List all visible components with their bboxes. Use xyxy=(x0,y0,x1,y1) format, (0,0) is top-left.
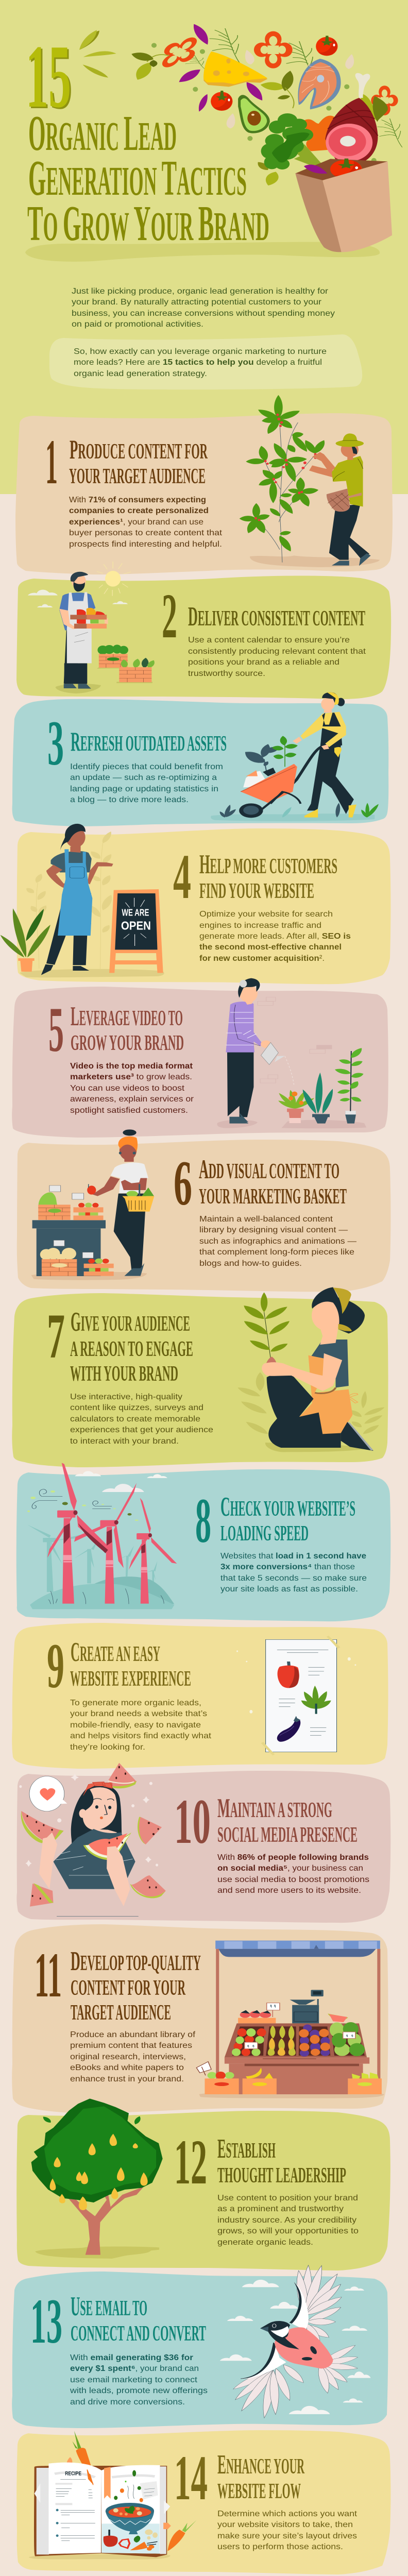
body text: engines to increase traffic and xyxy=(199,921,321,930)
heading xyxy=(217,2450,304,2503)
illustration: fruit market stall xyxy=(196,1941,384,2098)
card background xyxy=(16,1469,390,1621)
body text: landing page or updating statistics in xyxy=(70,785,218,793)
card background xyxy=(12,2272,388,2428)
body text: generate more leads. After all, SEO is xyxy=(199,932,351,941)
body text: companies to create personalized xyxy=(69,506,209,515)
title xyxy=(27,106,269,251)
body text: calculators to create memorable xyxy=(70,1415,200,1423)
intro callout text: So, how exactly can you leverage organic marketing to nurture xyxy=(74,347,327,356)
illustration: shop owner with open sign: OPEN xyxy=(121,919,151,933)
card background xyxy=(12,1623,388,1769)
panel: tactic 11: 11 xyxy=(35,1940,62,2010)
body text: blogs and how-to guides. xyxy=(199,1259,302,1268)
body text: Maintain a well-balanced content xyxy=(199,1215,333,1224)
body text: You can use videos to boost xyxy=(70,1084,185,1093)
panel: tactic 4 xyxy=(0,824,391,984)
card background xyxy=(12,1924,388,2113)
body text: grows, so will your opportunities to xyxy=(217,2227,359,2235)
body text: Video is the top media format xyxy=(70,1062,193,1071)
body text: enhance trust in your brand. xyxy=(70,2075,184,2083)
card background xyxy=(16,576,391,699)
illustration: woman pushing wheelbarrow xyxy=(211,692,380,821)
heading xyxy=(69,435,208,488)
panel: tactic 13: CONNECT AND CONVERT xyxy=(71,2322,206,2346)
title number 15 xyxy=(26,26,73,128)
title: GENERATION TACTICS xyxy=(28,150,247,206)
body text xyxy=(70,2030,196,2083)
heading xyxy=(71,2292,206,2346)
body text: Use a content calendar to ensure you’re xyxy=(188,636,350,645)
body text: they’re looking for. xyxy=(70,1743,145,1752)
heading: WITH YOUR BRAND xyxy=(70,1362,178,1386)
body text: original research, interviews, xyxy=(70,2053,186,2061)
body text: Websites that load in 1 second have xyxy=(220,1552,366,1561)
card background xyxy=(16,2430,390,2574)
heading xyxy=(71,1946,201,2025)
number 9: 9 xyxy=(47,1631,64,1701)
body text: and send more users to its website. xyxy=(217,1886,361,1895)
number 6: 6 xyxy=(174,1148,192,1218)
panel: tactic 8 xyxy=(16,1463,390,1621)
heading xyxy=(217,2134,346,2188)
body text: Use content to position your brand xyxy=(217,2194,358,2202)
title number 15: 15 xyxy=(27,28,73,128)
card background xyxy=(17,1140,390,1292)
panel: tactic 6 xyxy=(17,1129,390,1292)
intro callout text: more leads? Here are 15 tactics to help you develop a fruitful xyxy=(74,358,322,367)
body text: such as infographics and animations — xyxy=(199,1237,356,1246)
title: TO GROW YOUR BRAND xyxy=(27,196,269,251)
heading xyxy=(70,1307,193,1386)
body text xyxy=(217,2194,359,2247)
panel: tactic 5: 5 xyxy=(48,994,64,1065)
illustration: recipe page with vegetables xyxy=(236,1636,356,1755)
heading: A REASON TO ENGAGE xyxy=(70,1337,193,1361)
panel: tactic 7 xyxy=(12,1287,388,1467)
intro text: Just like picking produce, organic lead generation is healthy for xyxy=(72,287,329,296)
body text: the second most-effective channel xyxy=(199,943,342,952)
body text xyxy=(70,1699,212,1752)
heading: CREATE AN EASY xyxy=(71,1637,160,1667)
body text xyxy=(199,1215,356,1268)
panel: tactic 13 xyxy=(12,2265,388,2428)
body text: experiences¹ , your brand can use xyxy=(69,518,203,527)
heading xyxy=(70,1637,191,1691)
body text: an update — such as re-optimizing a xyxy=(70,773,217,782)
body text xyxy=(70,762,223,804)
body text: generate organic leads. xyxy=(217,2238,313,2247)
intro callout blob xyxy=(49,334,362,389)
body text: With 71% of consumers expecting xyxy=(69,496,206,504)
heading: PRODUCE CONTENT FOR xyxy=(70,435,208,465)
body text: premium content that features xyxy=(70,2041,192,2050)
body text: Determine which actions you want xyxy=(217,2510,358,2518)
panel: tactic 1: 1 xyxy=(45,427,58,497)
body text: spotlight satisfied customers. xyxy=(70,1106,188,1115)
body text xyxy=(220,1552,367,1594)
title ground shadow xyxy=(25,242,380,262)
body text xyxy=(199,910,351,963)
heading: DEVELOP TOP-QUALITY xyxy=(71,1946,201,1976)
body text: and drive more conversions. xyxy=(70,2398,185,2406)
title: ORGANIC LEAD xyxy=(28,106,177,161)
body text: content like quizzes, surveys and xyxy=(70,1403,203,1412)
body text: and helps visitors find exactly what xyxy=(70,1732,212,1740)
body text: use email marketing to connect xyxy=(70,2376,198,2384)
panel: tactic 11 xyxy=(12,1924,388,2113)
body text: Produce an abundant library of xyxy=(70,2030,196,2039)
card background xyxy=(12,987,388,1138)
body text xyxy=(70,1062,194,1115)
illustration: recipe book with soup xyxy=(29,2431,196,2560)
illustration: food falling into paper bag xyxy=(79,24,402,252)
body text: trustworthy source. xyxy=(188,669,265,678)
body text: your website visitors to take, then xyxy=(217,2520,353,2529)
illustration: shop owner with open sign: WE ARE xyxy=(122,907,149,918)
panel: tactic 2: 2 xyxy=(162,581,177,651)
panel: tactic 12 xyxy=(16,2098,390,2270)
illustration: farmer with crate, sun and clouds xyxy=(28,562,157,693)
body text xyxy=(69,496,223,549)
heading: TARGET AUDIENCE xyxy=(71,2001,171,2025)
illustration: wind turbines on hills xyxy=(27,1463,177,1609)
header panel xyxy=(25,24,402,389)
body text: that take 5 seconds — so make sure xyxy=(220,1574,367,1583)
body text: Identify pieces that could benefit from xyxy=(70,762,223,771)
illustration: bird flying among clouds xyxy=(220,2265,371,2418)
panel: tactic 1 xyxy=(15,395,393,574)
body text: users to perform those actions. xyxy=(217,2543,343,2551)
intro text xyxy=(72,287,335,329)
number 13: 13 xyxy=(30,2286,62,2357)
illustration: shopper at market stall xyxy=(31,1129,154,1280)
panel: tactic 14 xyxy=(16,2430,390,2574)
heading xyxy=(220,1492,355,1546)
body text: consistently producing relevant content that xyxy=(188,647,366,656)
number 3: 3 xyxy=(47,708,64,778)
illustration: woman eating watermelon xyxy=(19,1763,166,1916)
heading: CONTENT FOR YOUR xyxy=(71,1976,185,2000)
heading: GROW YOUR BRAND xyxy=(71,1031,184,1055)
panel: tactic 9: WEBSITE EXPERIENCE xyxy=(70,1667,191,1691)
body text: your site loads as fast as possible. xyxy=(220,1585,358,1594)
body text xyxy=(217,2510,358,2551)
body text: with leads, promote new offerings xyxy=(70,2386,208,2395)
heading: LOADING SPEED xyxy=(220,1522,309,1546)
panel: tactic 3 xyxy=(12,692,388,826)
body text: make sure your site’s layout drives xyxy=(217,2532,357,2540)
number 12: 12 xyxy=(174,2127,207,2197)
heading xyxy=(71,1002,184,1055)
body text xyxy=(188,636,366,678)
panel: tactic 10 xyxy=(16,1763,390,1923)
number 8: 8 xyxy=(195,1485,211,1556)
body text: eBooks and white papers to xyxy=(70,2063,184,2072)
body text: With email generating $36 for xyxy=(70,2353,193,2362)
heading: WEBSITE FLOW xyxy=(217,2480,301,2503)
body text: awareness, explain services or xyxy=(70,1095,194,1104)
panel: tactic 5: LEVERAGE VIDEO TO xyxy=(71,1002,183,1031)
heading xyxy=(217,1793,358,1847)
intro text: business, you can increase conversions without spending money xyxy=(72,309,335,318)
body text: 3x more conversions⁴ than those xyxy=(220,1563,355,1571)
body text xyxy=(70,2353,208,2406)
card background xyxy=(12,1293,388,1467)
body text: for new customer acquisition ². xyxy=(199,954,325,963)
number 7: 7 xyxy=(47,1301,65,1371)
body text: your brand needs a website that’s xyxy=(70,1709,207,1718)
card background xyxy=(15,413,393,574)
body text: industry source. As your credibility xyxy=(217,2216,356,2225)
title number 15: 15 xyxy=(26,26,71,126)
heading: GIVE YOUR AUDIENCE xyxy=(71,1307,190,1337)
heading xyxy=(199,1155,347,1209)
body text xyxy=(217,1853,369,1895)
card background xyxy=(12,699,388,826)
body text: use social media to boost promotions xyxy=(217,1875,369,1884)
number 10: 10 xyxy=(174,1786,211,1857)
number 14: 14 xyxy=(174,2443,208,2513)
body text: mobile-friendly, easy to navigate xyxy=(70,1721,201,1730)
intro text: on paid or promotional activities. xyxy=(72,320,203,329)
body text: library by designing visual content — xyxy=(199,1226,348,1234)
illustration: woman holding seedling xyxy=(236,1287,386,1452)
body text: as a prominent and trustworthy xyxy=(217,2205,344,2213)
body text: every $1 spent⁶ , your brand can xyxy=(70,2364,199,2373)
illustration: pear tree xyxy=(31,2098,163,2259)
body text: marketers use³ to grow leads. xyxy=(70,1073,192,1081)
body text: prospects find interesting and helpful. xyxy=(69,540,222,549)
illustration: recipe book with soup: RECIPE xyxy=(65,2470,81,2477)
body text: to interact with your brand. xyxy=(70,1437,179,1446)
card background xyxy=(17,828,390,984)
body text: on social media⁵ , your business can xyxy=(217,1864,363,1873)
heading: ENHANCE YOUR xyxy=(217,2450,304,2480)
intro text: your brand. By naturally attracting potential customers to your xyxy=(72,298,322,307)
panel: tactic 1: YOUR TARGET AUDIENCE xyxy=(69,465,206,488)
illustration: farmer picking berries xyxy=(240,395,380,567)
body text: buyer personas to create content that xyxy=(69,529,223,537)
heading: USE EMAIL TO xyxy=(71,2292,147,2321)
body text: To generate more organic leads, xyxy=(70,1699,201,1707)
heading: REFRESH OUTDATED ASSETS xyxy=(71,727,227,757)
body text: experiences that get your audience xyxy=(70,1426,213,1434)
body text: that complement long-form pieces like xyxy=(199,1248,354,1257)
panel: tactic 5 xyxy=(12,978,388,1138)
body text: With 86% of people following brands xyxy=(217,1853,369,1862)
heading xyxy=(199,850,337,903)
heading: ESTABLISH xyxy=(217,2134,276,2164)
panel: tactic 2 xyxy=(16,562,391,699)
card background xyxy=(16,2111,390,2270)
number 4: 4 xyxy=(173,841,191,912)
body text xyxy=(70,1393,213,1446)
panel: tactic 9 xyxy=(12,1623,388,1769)
intro callout text: organic lead generation strategy. xyxy=(74,369,207,378)
illustration: shop owner with open sign xyxy=(0,824,164,977)
body text: a blog — to drive more leads. xyxy=(70,795,189,804)
body text: Optimize your website for search xyxy=(199,910,333,919)
card background xyxy=(16,1771,390,1923)
body text: Use interactive, high-quality xyxy=(70,1393,182,1401)
body text: positions your brand as a reliable and xyxy=(188,658,339,667)
illustration: man watering plants xyxy=(217,978,366,1128)
intro callout text xyxy=(74,347,327,378)
